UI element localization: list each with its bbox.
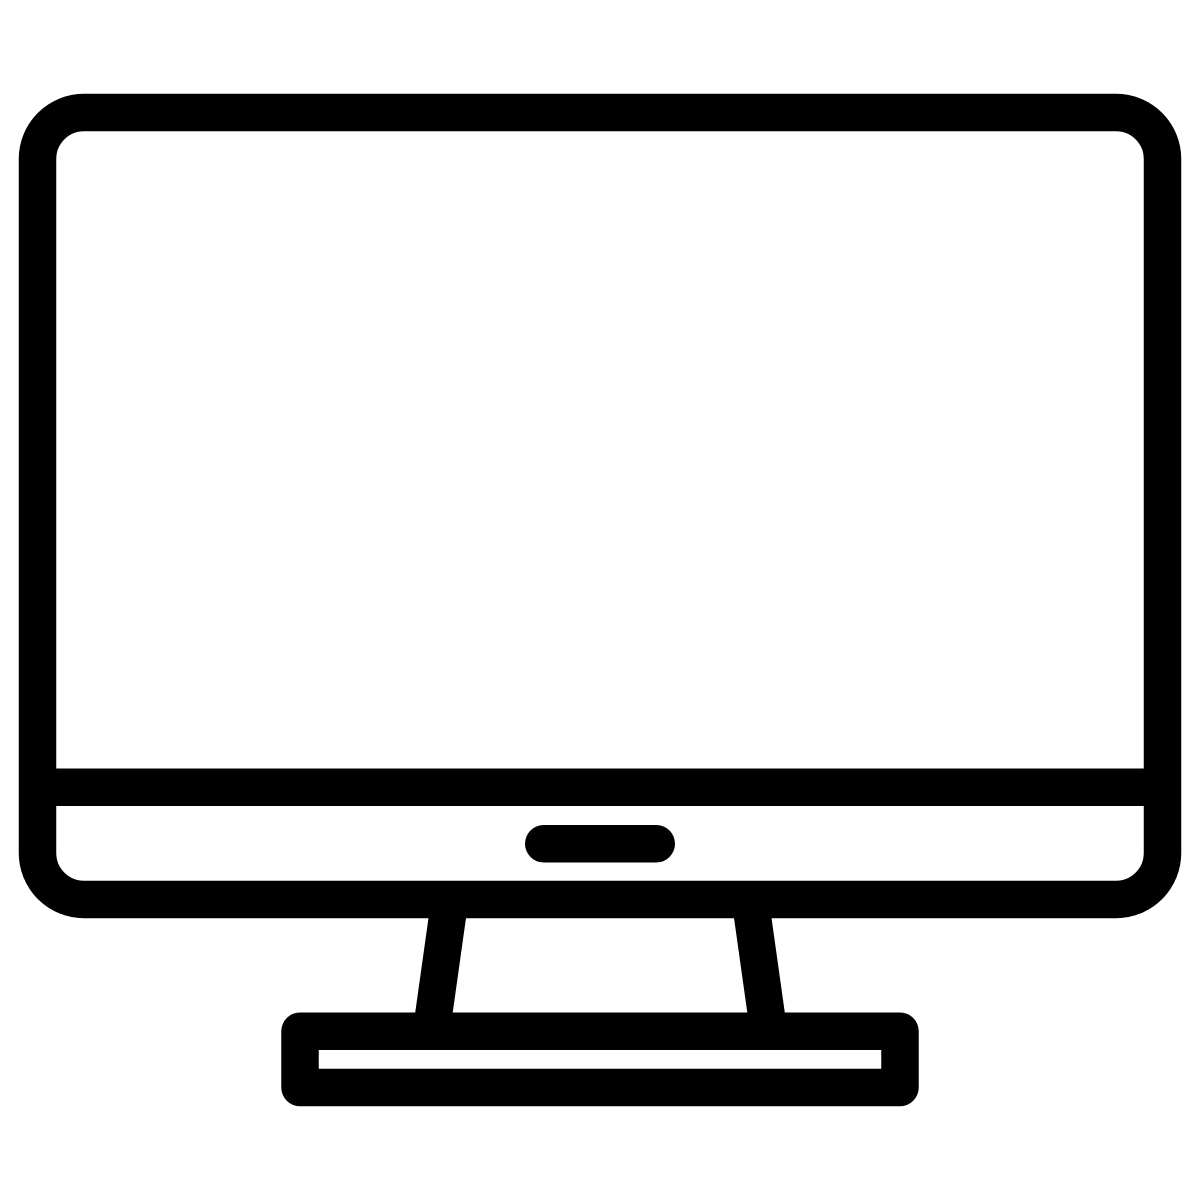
stand base — [281, 1012, 919, 1106]
monitor stand — [415, 918, 785, 1014]
monitor body — [38, 112, 1162, 900]
power button — [525, 825, 675, 862]
screen divider — [38, 768, 1162, 806]
